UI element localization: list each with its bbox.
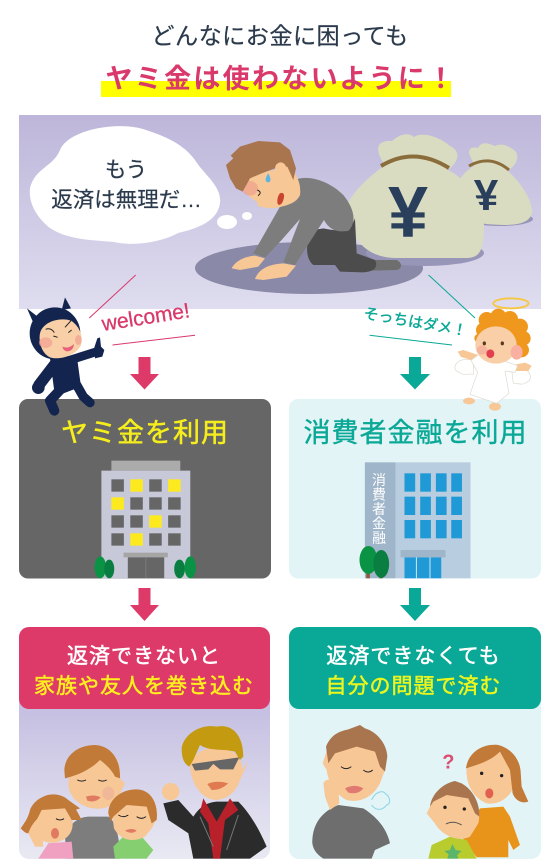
banner line 2: 自分の問題で済む	[326, 675, 502, 698]
icon: blue building	[359, 462, 471, 578]
arrow: teal top	[400, 357, 430, 390]
woman	[462, 807, 520, 857]
line: angel pointer lower	[370, 335, 452, 345]
vertical label: 消	[372, 472, 386, 488]
thought bubble: 返済は無理だ…	[51, 188, 202, 212]
vertical label: 費	[372, 486, 386, 502]
arms	[458, 350, 480, 362]
banner line 1: 返済できなくても	[326, 645, 501, 668]
illustration: man sighing, woman and boy	[312, 725, 528, 859]
illustration: angel	[455, 298, 532, 411]
breath	[372, 792, 390, 809]
large yen: ¥	[388, 173, 428, 253]
icon: dark building	[95, 461, 196, 578]
man	[163, 800, 267, 859]
girl	[38, 842, 73, 859]
panel: yami-kin box	[19, 399, 271, 578]
feet	[463, 398, 475, 404]
vertical label: 金	[372, 516, 386, 532]
panel: consumer finance box	[289, 399, 541, 578]
small yen: ¥	[474, 171, 499, 220]
banner	[19, 627, 270, 709]
man	[312, 805, 390, 859]
boy	[428, 837, 477, 859]
yellow highlight	[101, 81, 451, 97]
line: angel pointer upper	[429, 275, 475, 318]
heading: ヤミ金を利用	[61, 418, 229, 448]
handwritten text: sotchi wa dame: そっちはダメ！	[362, 305, 468, 340]
handwritten text: welcome: welcome!	[99, 299, 191, 336]
title line 1: どんなにお金に困っても	[151, 23, 409, 49]
icon: money bag small	[455, 143, 533, 226]
ground shadow	[195, 242, 423, 294]
banner line 1: 返済できないと	[67, 645, 221, 668]
wings	[455, 359, 473, 374]
line: devil pointer lower	[112, 335, 195, 345]
line: devil pointer upper	[89, 275, 136, 318]
heading: 消費者金融を利用	[304, 418, 528, 448]
icon: money bag large	[347, 134, 484, 266]
dress	[470, 354, 518, 403]
hair	[474, 309, 531, 357]
vertical label: 融	[372, 530, 386, 546]
panel: yami-kin result	[19, 627, 270, 859]
vertical label	[372, 472, 386, 546]
halo	[493, 298, 529, 308]
arrow: pink top	[130, 357, 159, 390]
bubble text: もう	[105, 158, 147, 182]
panel: consumer finance result	[289, 627, 541, 859]
thought bubble	[30, 126, 252, 244]
banner line 2: 家族や友人を巻き込む	[34, 675, 254, 698]
title line 2: ヤミ金は使わないように！	[105, 64, 457, 94]
title	[101, 23, 457, 97]
face	[475, 326, 517, 364]
vertical label: 者	[372, 501, 386, 517]
banner	[289, 627, 541, 709]
illustration: kneeling man	[226, 141, 401, 280]
illustration: devil	[27, 297, 104, 411]
illustration: family and loan shark	[21, 726, 267, 859]
arrow: pink lower	[130, 588, 159, 621]
panel: top scene	[19, 115, 541, 309]
woman	[65, 817, 120, 859]
question mark: ?	[442, 751, 454, 773]
arrow: teal lower	[400, 588, 430, 621]
boy	[113, 837, 153, 859]
